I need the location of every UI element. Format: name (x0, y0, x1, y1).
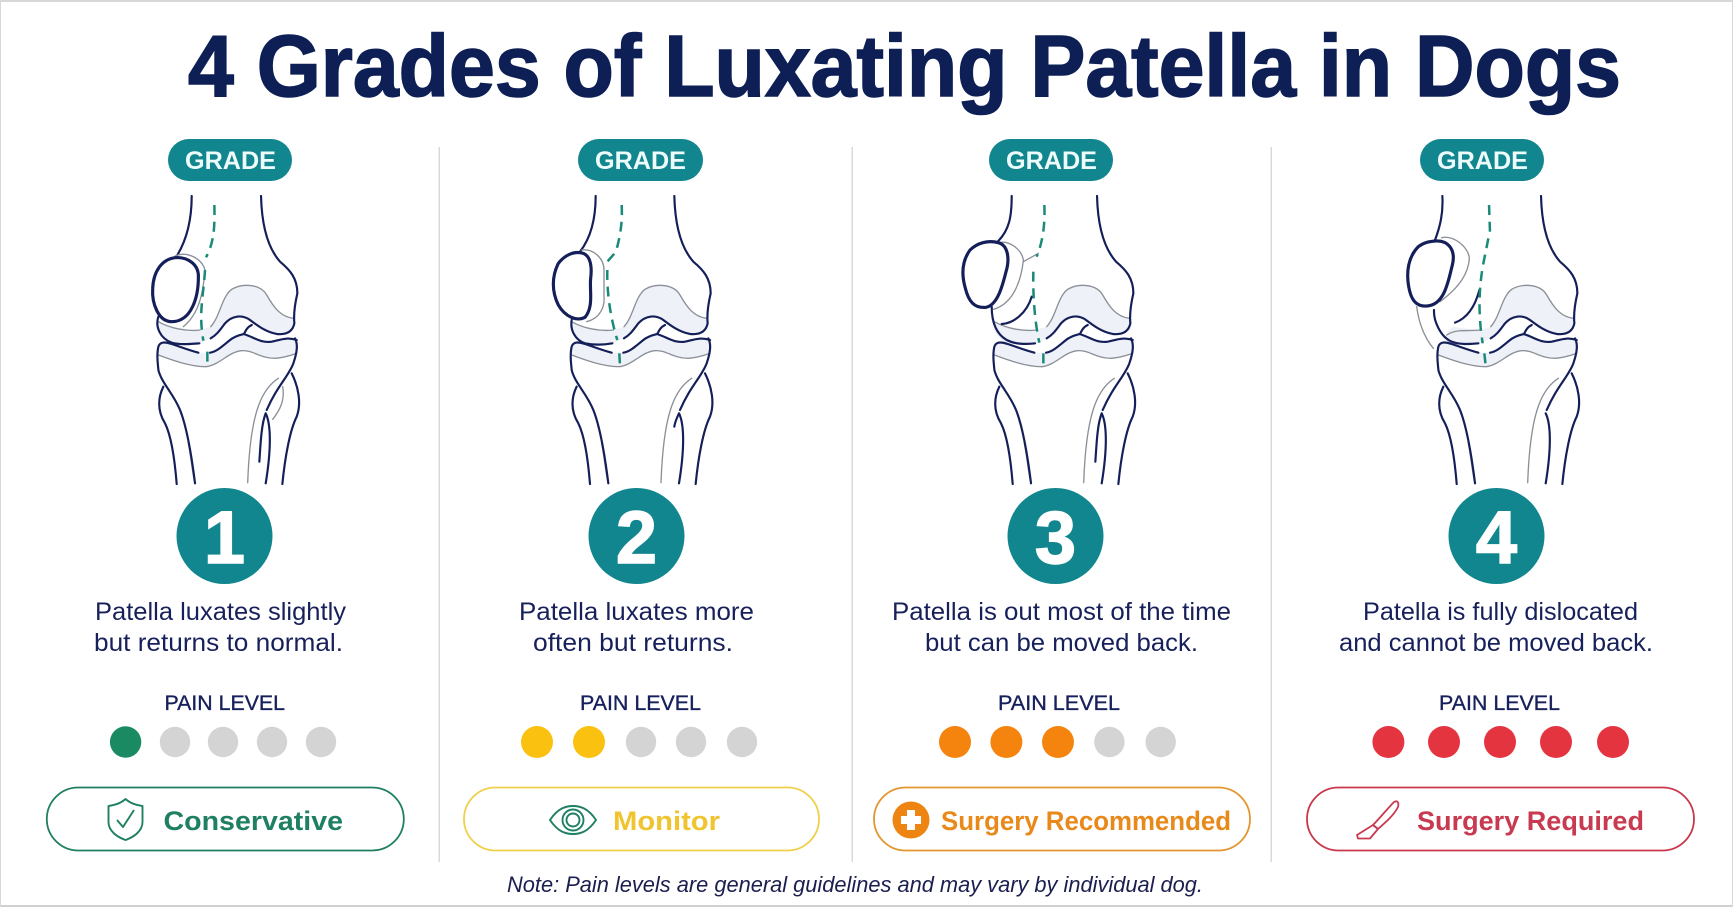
pain level grade 3 (939, 692, 1176, 758)
description grade 4: and cannot be moved back. (1339, 629, 1653, 657)
treatment pill: surgery required (1307, 788, 1694, 850)
treatment pill: surgery required: Surgery Required (1417, 806, 1644, 836)
grade number 1: 1 (204, 496, 245, 579)
description grade 2: often but returns. (533, 629, 733, 657)
treatment pill: surgery recommended (874, 788, 1250, 850)
grade number 2 (588, 488, 684, 584)
knee illustration grade 3 (963, 196, 1135, 484)
grade 2 badge: GRADE (595, 147, 686, 175)
knee illustration grade 2 (553, 196, 712, 484)
icon: medical cross (892, 802, 930, 838)
pain level grade 3: PAIN LEVEL (998, 692, 1120, 715)
grade 4 badge (1420, 139, 1544, 181)
pain level grade 2: PAIN LEVEL (580, 692, 701, 715)
treatment pill: monitor (464, 788, 819, 850)
panel: grade 2 (464, 139, 819, 850)
treatment pill: conservative (47, 788, 404, 850)
panel: grade 4 (1307, 139, 1694, 850)
knee illustration grade 4 (1408, 196, 1579, 484)
grade 2 badge (578, 139, 703, 181)
description grade 1: but returns to normal. (94, 629, 343, 657)
knee illustration grade 1 (153, 196, 299, 484)
pain level grade 1: PAIN LEVEL (164, 692, 285, 715)
grade number 1 (176, 488, 272, 584)
description grade 2: Patella luxates more (519, 598, 754, 626)
panel: grade 1 (47, 139, 404, 850)
grade number 4: 4 (1476, 496, 1517, 579)
grade number 4 (1448, 488, 1544, 584)
treatment pill: surgery recommended: Surgery Recommended (941, 806, 1231, 836)
description grade 3: but can be moved back. (925, 629, 1198, 657)
grade 1 badge: GRADE (185, 147, 276, 175)
description grade 1: Patella luxates slightly (95, 598, 347, 626)
description grade 3: Patella is out most of the time (892, 598, 1231, 626)
pain level grade 4: PAIN LEVEL (1439, 692, 1560, 715)
treatment pill: monitor: Monitor (613, 806, 721, 836)
pain level grade 1 (110, 692, 336, 758)
grade number 3 (1008, 488, 1104, 584)
description grade 2 (519, 598, 754, 657)
description grade 4: Patella is fully dislocated (1363, 598, 1638, 626)
grade 3 badge (989, 139, 1113, 181)
grade 4 badge: GRADE (1437, 147, 1528, 175)
icon: shield (108, 799, 142, 840)
description grade 3 (892, 598, 1231, 657)
grade 1 badge (168, 139, 292, 181)
icon: eye (550, 806, 596, 834)
grade 3 badge: GRADE (1006, 147, 1097, 175)
description grade 1 (94, 598, 347, 657)
grade number 2: 2 (616, 496, 657, 579)
pain level grade 4 (1372, 692, 1629, 758)
panel: grade 3 (874, 139, 1250, 850)
description grade 4 (1339, 598, 1653, 657)
pain level grade 2 (521, 692, 757, 758)
title: 4 Grades of Luxating Patella in Dogs (188, 18, 1621, 115)
grade number 3: 3 (1035, 496, 1076, 579)
treatment pill: conservative: Conservative (164, 806, 343, 836)
footnote: Note: Pain levels are general guidelines and may vary by individual dog. (507, 872, 1203, 897)
icon: scalpel (1357, 801, 1398, 838)
